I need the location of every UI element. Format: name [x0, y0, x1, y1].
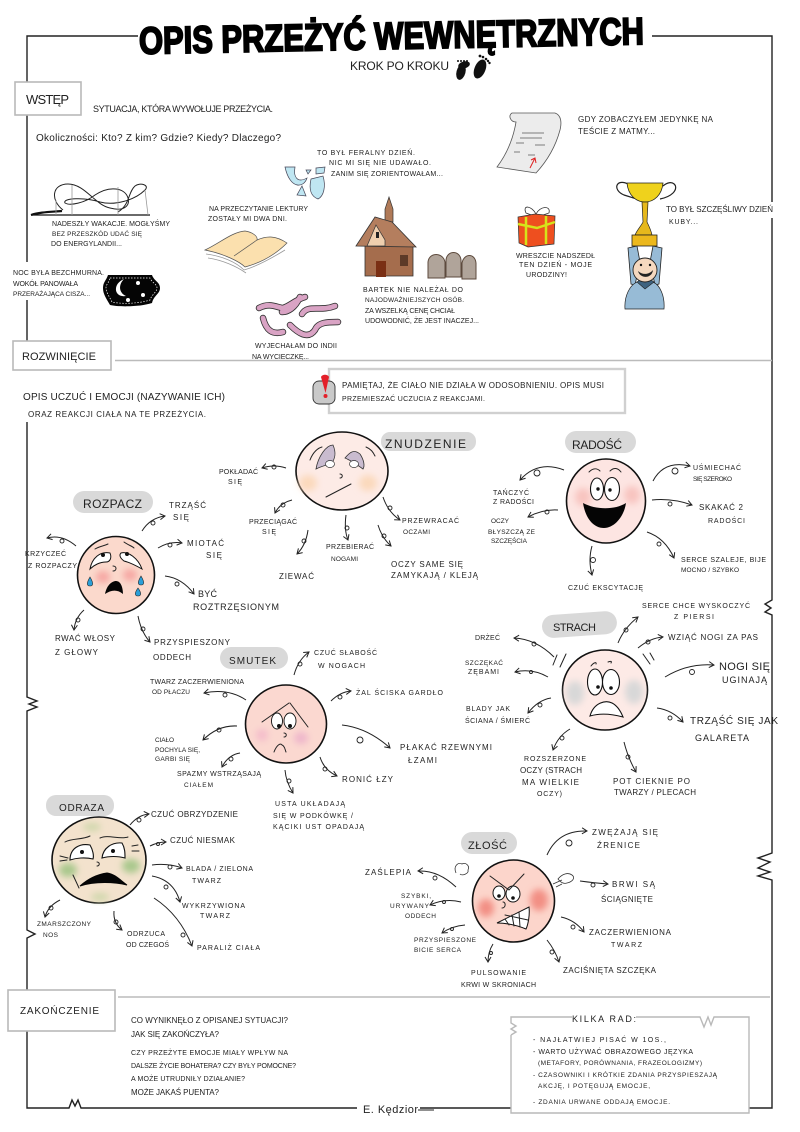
reaction: przeciągać się [249, 500, 297, 536]
reaction: pot cieknie [613, 742, 696, 797]
reaction: paraliż ciała [154, 898, 260, 952]
reaction: brwi są ściągnięte: BRWI SĄ [612, 880, 656, 889]
pill: znudzenie [381, 432, 476, 451]
reaction: miotać się [158, 539, 224, 560]
pill: odraza [46, 795, 114, 816]
example: test paper [497, 113, 714, 173]
reaction: rwać włosy [55, 610, 116, 657]
reaction: pulsowanie krwi: PULSOWANIE [471, 970, 526, 977]
section label: ROZWINIĘCIE [13, 341, 772, 370]
reaction: rozszerzone oczy: ROZSZERZONE [524, 756, 586, 763]
reaction: miotać się: MIOTAĆ [187, 539, 224, 548]
emotion: ZŁOŚĆ [365, 828, 672, 989]
pill: odraza: ODRAZA [59, 803, 104, 814]
face: bored [296, 432, 388, 510]
reaction: twarz zaczerwieniona: TWARZ ZACZERWIENIONA [150, 679, 244, 686]
pill: znudzenie: ZNUDZENIE [385, 437, 466, 451]
reaction: czuć ekscytację [568, 546, 643, 592]
reaction: trząść się jak galareta: TRZĄŚĆ SIĘ JAK [690, 714, 778, 727]
reaction: nogi się uginają [665, 661, 770, 685]
development intro text [23, 390, 225, 419]
reaction: oczy błyszczą [488, 510, 558, 545]
reaction: uśmiechać się szeroko [653, 463, 741, 483]
example: wooden church and graves: ZA WSZELKĄ CENĘ CHCIAŁ [365, 308, 455, 315]
reaction: rozszerzone oczy: OCZY) [537, 791, 562, 798]
reaction: przebierać nogami [326, 515, 374, 563]
reaction: oczy same się zamykają [378, 525, 479, 580]
pill: złość: ZŁOŚĆ [468, 839, 507, 852]
reaction: rozszerzone oczy [520, 729, 586, 798]
reaction: brwi są ściągnięte: ŚCIĄGNIĘTE [601, 895, 653, 904]
reaction: serce szaleje [647, 532, 766, 574]
title: OPIS PRZEŻYĆ WEWNĘTRZNYCH [139, 9, 644, 63]
reaction: przyspieszone bicie serca [414, 925, 477, 954]
reaction: usta w podkówkę: SIĘ W PODKÓWKĘ / [273, 811, 353, 820]
example: trophy and happy boy: TO BYŁ SZCZĘŚLIWY DZIEŃ [666, 205, 773, 214]
reaction: zwężają się źrenice [547, 828, 658, 855]
reaction: blady jak ściana [465, 698, 551, 725]
reaction: szczękać zębami [465, 658, 548, 677]
callout: remember: PRZEMIESZAĆ UCZUCIA Z REAKCJAMI. [342, 394, 485, 403]
reaction: tańczyć z radości: Z RADOŚCI [493, 497, 534, 506]
reaction: ciało pochyla się [155, 726, 237, 763]
reaction: czuć niesmak [150, 836, 236, 846]
advice box: KILKA RAD: [572, 1014, 636, 1024]
reaction: płakać rzewnymi łzami [342, 725, 492, 765]
reaction: szczękać zębami: ZĘBAMI [468, 669, 499, 676]
reaction: przeciągać się: SIĘ [262, 529, 276, 536]
development intro text: OPIS UCZUĆ I EMOCJI (NAZYWANIE ICH) [23, 390, 225, 403]
reaction: rwać włosy: Z GŁOWY [55, 648, 99, 657]
reaction: rozszerzone oczy: OCZY (STRACH [520, 766, 582, 775]
advice box: - NAJŁATWIEJ PISAĆ W 1OS., [533, 1035, 666, 1044]
reaction: skakać z radości [652, 500, 745, 525]
development intro text: ORAZ REAKCJI CIAŁA NA TE PRZEŻYCIA. [28, 410, 206, 419]
reaction: serce chce wyskoczyć: SERCE CHCE WYSKOCZYĆ [642, 601, 750, 610]
reaction: serce szaleje: SERCE SZALEJE, BIJE [681, 557, 766, 564]
example: broken glass [285, 148, 443, 199]
reaction: blada / zielona twarz [152, 864, 253, 885]
example: open book: NA PRZECZYTANIE LEKTURY [209, 206, 308, 213]
emotion: STRACH [465, 601, 778, 798]
pill: radość: RADOŚĆ [572, 437, 622, 452]
example: night sky: PRZERAŻAJĄCA CISZA... [13, 289, 90, 298]
callout: remember [313, 369, 625, 413]
reaction: drżeć: DRŻEĆ [475, 633, 500, 642]
reaction: skakać z radości: SKAKAĆ 2 [699, 503, 744, 512]
emotion: ROZPACZ [25, 491, 279, 662]
section label: ZAKOŃCZENIE: ZAKOŃCZENIE [20, 1004, 99, 1017]
reaction: odrzuca od czegoś: OD CZEGOŚ [126, 940, 169, 949]
example: gift: URODZINY! [526, 272, 567, 279]
reaction: przebierać nogami: NOGAMI [331, 556, 358, 563]
reaction: usta w podkówkę: KĄCIKI UST OPADAJĄ [273, 824, 364, 831]
reaction: czuć obrzydzenie [130, 810, 238, 825]
example: gift: TEN DZIEŃ - MOJE [519, 260, 592, 269]
pill: rozpacz: ROZPACZ [83, 497, 142, 511]
reaction: zmarszczony nos [37, 900, 92, 939]
reaction: szybki urywany oddech: URYWANY [390, 903, 430, 910]
reaction: trząść się: TRZĄŚĆ [169, 501, 206, 510]
reaction: szczękać zębami: SZCZĘKAĆ [465, 658, 503, 667]
face: joy [566, 459, 646, 543]
reaction: pot cieknie: POT CIEKNIE PO [613, 777, 690, 786]
pill: strach: STRACH [553, 622, 596, 634]
reaction: czuć obrzydzenie: CZUĆ OBRZYDZENIE [151, 810, 238, 819]
reaction: być roztrzęsionym [165, 576, 279, 612]
reaction: zmarszczony nos: ZMARSZCZONY [37, 921, 92, 928]
example: gift [516, 207, 595, 279]
example: wooden church and graves [356, 197, 479, 325]
reaction: czuć słabość: W NOGACH [318, 663, 365, 670]
example: wooden church and graves: BARTEK NIE NALEŻAŁ DO [363, 285, 464, 294]
example: worms: WYJECHAŁAM DO INDII [255, 343, 337, 350]
icon: footprints [455, 55, 491, 81]
reaction: żal ściska gardło [331, 688, 444, 701]
section label: ZAKOŃCZENIE [8, 990, 770, 1031]
example: night sky: NOC BYŁA BEZCHMURNA. [13, 270, 104, 277]
reaction: blady jak ściana: ŚCIANA / ŚMIERĆ [465, 716, 530, 725]
conclusion questions: CO WYNIKNĘŁO Z OPISANEJ SYTUACJI? [131, 1016, 289, 1025]
reaction: usta w podkówkę: USTA UKŁADAJĄ [275, 801, 345, 808]
example: roller coaster: BEZ PRZESZKÓD UDAĆ SIĘ [52, 229, 143, 238]
pill: rozpacz [73, 491, 153, 513]
intro text: SYTUACJA, KTÓRA WYWOŁUJE PRZEŻYCIA. [93, 104, 273, 114]
reaction: miotać się: SIĘ [206, 551, 222, 560]
example: wooden church and graves: UDOWODNIĆ, ŻE JEST INACZEJ... [365, 316, 479, 325]
reaction: oczy błyszczą: SZCZĘŚCIA [491, 536, 528, 545]
reaction: zaczerwieniona twarz [561, 917, 672, 949]
reaction: skakać z radości: RADOŚCI [708, 516, 745, 525]
reaction: uśmiechać się szeroko: UŚMIECHAĆ [693, 463, 741, 472]
reaction: zmarszczony nos: NOS [43, 932, 59, 939]
pill: radość [565, 431, 636, 453]
reaction: tańczyć z radości [493, 467, 564, 506]
reaction: serce szaleje: MOCNO / SZYBKO [681, 567, 739, 574]
example: roller coaster [31, 184, 170, 248]
reaction: blada / zielona twarz: TWARZ [192, 878, 222, 885]
reaction: wykrzywiona twarz: WYKRZYWIONA [182, 903, 245, 910]
conclusion questions: JAK SIĘ ZAKOŃCZYŁA? [131, 1030, 220, 1039]
reaction: ciało pochyla się: POCHYLA SIĘ, [155, 747, 200, 754]
reaction: pot cieknie: TWARZY / PLECACH [614, 788, 696, 797]
reaction: nogi się uginają: NOGI SIĘ [719, 661, 770, 673]
reaction: serce chce wyskoczyć [618, 601, 750, 643]
example: roller coaster: DO ENERGYLANDII... [51, 241, 122, 248]
reaction: zwężają się źrenice: ZWĘŻAJĄ SIĘ [592, 828, 658, 837]
reaction: płakać rzewnymi łzami: ŁZAMI [408, 756, 437, 765]
reaction: trząść się jak galareta [657, 708, 778, 743]
reaction: rozszerzone oczy: MA WIELKIE [522, 778, 579, 787]
reaction: spazmy: CIAŁEM [184, 782, 213, 789]
reaction: trząść się: SIĘ [173, 513, 189, 522]
reaction: ciało pochyla się: CIAŁO [155, 737, 174, 744]
reaction: paraliż ciała: PARALIŻ CIAŁA [197, 943, 260, 952]
reaction: zaślepia: ZAŚLEPIA [365, 868, 412, 877]
face: sadness [246, 685, 326, 763]
reaction: pulsowanie krwi [461, 944, 536, 989]
advice box: (METAFORY, PORÓWNANIA, FRAZEOLOGIZMY) [538, 1058, 702, 1067]
subtitle: KROK PO KROKU [350, 59, 449, 73]
example: wooden church and graves: NAJODWAŻNIEJSZYCH OSÓB. [365, 295, 464, 304]
reaction: oczy same się zamykają: ZAMYKAJĄ / KLEJĄ [391, 571, 479, 580]
reaction: przeciągać się: PRZECIĄGAĆ [249, 517, 297, 526]
pill: złość [461, 832, 517, 854]
example: broken glass: TO BYŁ FERALNY DZIEŃ. [317, 148, 415, 157]
reaction: wziąć nogi za pas: WZIĄĆ NOGI ZA PAS [668, 633, 758, 642]
example: worms [252, 297, 338, 361]
reaction: krzyczeć z rozpaczy: Z ROZPACZY [28, 563, 77, 570]
example: broken glass: NIC MI SIĘ NIE UDAWAŁO. [329, 160, 431, 167]
reaction: usta w podkówkę [273, 770, 364, 831]
face: fear [553, 650, 654, 730]
intro text [36, 104, 281, 144]
reaction: tańczyć z radości: TAŃCZYĆ [493, 488, 529, 497]
advice box: - ZDANIA URWANE ODDAJĄ EMOCJE. [533, 1099, 670, 1106]
reaction: oczy błyszczą: BŁYSZCZĄ ZE [488, 529, 536, 536]
reaction: wykrzywiona twarz [152, 876, 245, 920]
conclusion questions: MOŻE JAKAŚ PUENTA? [131, 1088, 220, 1097]
face: despair [78, 536, 154, 614]
example: gift: WRESZCIE NADSZEDŁ [516, 253, 595, 260]
reaction: żal ściska gardło: ŻAL ŚCISKA GARDŁO [356, 688, 444, 697]
example: open book [205, 206, 308, 273]
reaction: ronić łzy: RONIĆ ŁZY [342, 775, 394, 784]
intro text: Okoliczności: Kto? Z kim? Gdzie? Kiedy? Dlaczego? [36, 133, 281, 144]
reaction: czuć niesmak: CZUĆ NIESMAK [170, 836, 236, 845]
reaction: oczy błyszczą: OCZY [491, 518, 510, 525]
reaction: przyspieszony oddech: ODDECH [153, 653, 191, 662]
reaction: zwężają się źrenice: ŹRENICE [597, 841, 640, 850]
reaction: uśmiechać się szeroko: SIĘ SZEROKO [693, 476, 732, 483]
reaction: nogi się uginają: UGINAJĄ [722, 675, 768, 685]
reaction: wykrzywiona twarz: TWARZ [200, 913, 231, 920]
reaction: twarz zaczerwieniona [150, 679, 246, 700]
emotion: ZNUDZENIE [219, 432, 479, 581]
reaction: zaciśnięta szczęka: ZACIŚNIĘTA SZCZĘKA [563, 966, 657, 975]
reaction: wziąć nogi za pas [638, 633, 758, 648]
conclusion questions: A MOŻE UTRUDNIŁY DZIAŁANIE? [131, 1074, 245, 1083]
emotion: SMUTEK [150, 647, 492, 831]
reaction: blady jak ściana: BLADY JAK [466, 706, 510, 713]
reaction: szybki urywany oddech [390, 893, 461, 920]
example: worms: NA WYCIECZKĘ... [252, 354, 309, 361]
advice box: AKCJĘ, I POTĘGUJĄ EMOCJE, [538, 1083, 650, 1090]
reaction: ziewać: ZIEWAĆ [279, 572, 314, 581]
reaction: przyspieszony oddech: PRZYSPIESZONY [154, 638, 231, 647]
advice box [511, 1014, 749, 1113]
reaction: płakać rzewnymi łzami: PŁAKAĆ RZEWNYMI [400, 743, 492, 752]
reaction: trząść się jak galareta: GALARETA [695, 733, 749, 743]
conclusion questions [131, 1016, 296, 1097]
example: trophy and happy boy [617, 182, 773, 309]
conclusion questions: DALSZE ŻYCIE BOHATERA? CZY BYŁY POMOCNE? [131, 1061, 296, 1070]
example: trophy and happy boy: KUBY... [669, 219, 698, 226]
reaction: być roztrzęsionym: BYĆ [198, 589, 218, 599]
pill: smutek: SMUTEK [229, 656, 276, 667]
reaction: szybki urywany oddech: ODDECH [405, 913, 436, 920]
reaction: ziewać [279, 530, 314, 581]
reaction: przyspieszone bicie serca: PRZYSPIESZONE [414, 937, 477, 944]
advice box: - CZASOWNIKI I KRÓTKIE ZDANIA PRZYSPIESZAJĄ [533, 1070, 718, 1079]
reaction: oczy same się zamykają: OCZY SAME SIĘ [391, 560, 463, 569]
advice box: - WARTO UŻYWAĆ OBRAZOWEGO JĘZYKA [533, 1047, 693, 1056]
reaction: przyspieszone bicie serca: BICIE SERCA [414, 947, 462, 954]
reaction: być roztrzęsionym: ROZTRZĘSIONYM [193, 602, 279, 612]
reaction: brwi są ściągnięte [580, 880, 656, 904]
reaction: zaślepia [365, 868, 456, 887]
reaction: zaczerwieniona twarz: TWARZ [611, 942, 643, 949]
reaction: pulsowanie krwi: KRWI W SKRONIACH [461, 982, 536, 989]
reaction: czuć ekscytację: CZUĆ EKSCYTACJĘ [568, 583, 643, 592]
section label: WSTĘP: WSTĘP [26, 92, 69, 107]
reaction: pokładać się: POKŁADAĆ [219, 467, 258, 476]
reaction: serce chce wyskoczyć: Z PIERSI [674, 614, 714, 621]
reaction: zaczerwieniona twarz: ZACZERWIENIONA [589, 928, 672, 937]
reaction: szybki urywany oddech: SZYBKI, [401, 893, 431, 900]
reaction: drżeć [475, 633, 554, 657]
reaction: krzyczeć z rozpaczy: KRZYCZEĆ [25, 549, 66, 558]
reaction: odrzuca od czegoś [114, 911, 169, 949]
reaction: pokładać się [219, 465, 286, 486]
example: night sky [13, 270, 160, 306]
section label: ROZWINIĘCIE: ROZWINIĘCIE [22, 351, 96, 363]
example: test paper: TEŚCIE Z MATMY... [578, 127, 655, 136]
reaction: trząść się [142, 501, 206, 531]
reaction: twarz zaczerwieniona: OD PŁACZU [152, 689, 190, 696]
example: test paper: GDY ZOBACZYŁEM JEDYNKĘ NA [578, 115, 714, 124]
reaction: ronić łzy [320, 757, 394, 784]
reaction: czuć słabość: CZUĆ SŁABOŚĆ [314, 648, 377, 657]
reaction: przebierać nogami: PRZEBIERAĆ [326, 542, 374, 551]
reaction: czuć słabość [294, 648, 377, 675]
section label: WSTĘP [15, 82, 81, 115]
emotion: ODRAZA [37, 795, 260, 952]
face: disgust [52, 817, 146, 903]
face: anger [455, 860, 574, 942]
reaction: spazmy: SPAZMY WSTRZĄSAJĄ [177, 771, 261, 778]
pill: strach [541, 610, 618, 639]
reaction: blada / zielona twarz: BLADA / ZIELONA [186, 866, 253, 873]
reaction: przewracać oczami: PRZEWRACAĆ [402, 516, 459, 525]
reaction: ciało pochyla się: GARBI SIĘ [155, 756, 191, 763]
reaction: przewracać oczami [383, 497, 459, 536]
pill: smutek [220, 647, 288, 669]
example: roller coaster: NADESZŁY WAKACJE. MOGŁYŚMY [52, 219, 170, 228]
example: night sky: WOKÓŁ PANOWAŁA [13, 279, 78, 288]
reaction: odrzuca od czegoś: ODRZUCA [127, 931, 165, 938]
example: broken glass: ZANIM SIĘ ZORIENTOWAŁAM... [331, 171, 443, 178]
reaction: przyspieszony oddech [138, 616, 231, 662]
author signature: E. Kędzior [363, 1104, 418, 1116]
reaction: spazmy [177, 753, 261, 789]
emotion: RADOŚĆ [488, 431, 766, 592]
callout: remember: PAMIĘTAJ, ŻE CIAŁO NIE DZIAŁA W ODOSOBNIENIU. OPIS MUSI [342, 381, 604, 390]
reaction: krzyczeć z rozpaczy [25, 537, 77, 570]
reaction: przewracać oczami: OCZAMI [403, 529, 430, 536]
example: open book: ZOSTAŁY MI DWA DNI. [208, 216, 287, 223]
reaction: rwać włosy: RWAĆ WŁOSY [55, 634, 116, 643]
reaction: pokładać się: SIĘ [228, 479, 242, 486]
reaction: zaciśnięta szczęka [547, 940, 657, 975]
conclusion questions: CZY PRZEŻYTE EMOCJE MIAŁY WPŁYW NA [131, 1048, 288, 1057]
